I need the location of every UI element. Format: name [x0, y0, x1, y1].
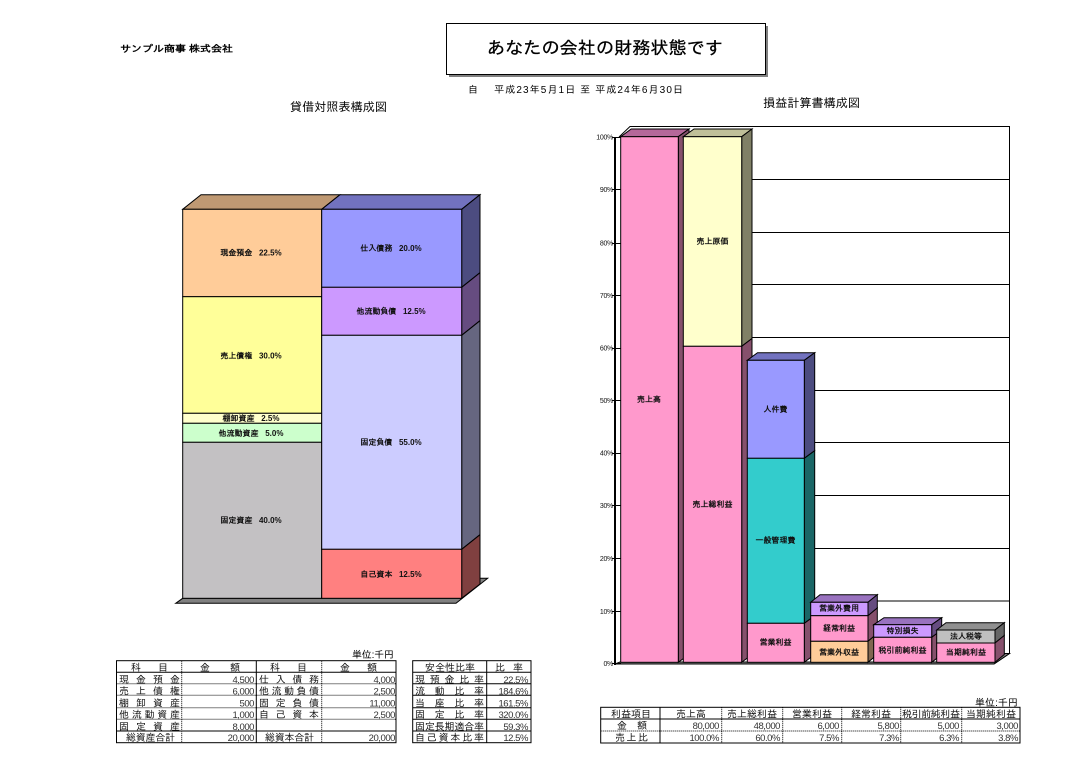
ratio rows: 12.5% — [503, 733, 529, 744]
equity — [322, 549, 462, 598]
bar: sales — [621, 129, 689, 662]
table rows: 棚卸資産 — [119, 698, 180, 710]
chart floor — [176, 578, 488, 603]
table rows: 2,500 — [373, 710, 395, 721]
bar: extraordinary loss and pre-tax profit: 税引前純利益 — [878, 645, 928, 655]
ratio rows: 184.6% — [498, 686, 529, 698]
ratio rows: 22.5% — [503, 675, 529, 686]
header row: 安全性比率 — [425, 662, 475, 674]
table rows: 4,500 — [232, 675, 254, 686]
table rows: 自己資本 — [259, 709, 319, 721]
profit table — [601, 707, 1020, 744]
table rows: 他流動資産 — [119, 709, 180, 721]
chart floor — [615, 654, 1010, 664]
reporting period: 自 平成23年5月1日 至 平成24年6月30日 — [468, 84, 683, 96]
balance sheet chart heading: 貸借対照表構成図 — [290, 100, 387, 114]
sales ratio row: 売上比 — [615, 732, 648, 744]
table rows: 20,000 — [369, 733, 395, 744]
bar: personnel, general admin, operating profit: 人件費 — [764, 404, 788, 414]
header row: 金 額 — [340, 663, 377, 674]
amount row: 48,000 — [754, 721, 780, 732]
equity: 自己資本 12.5% — [360, 569, 422, 579]
table rows: 8,000 — [232, 722, 254, 733]
asset: inventory: 棚卸資産 2.5% — [222, 413, 279, 423]
header row: 売上高 — [676, 710, 706, 720]
amount row: 6,000 — [817, 721, 839, 732]
table rows: 11,000 — [369, 698, 395, 710]
bar: cost of sales and gross profit: 売上総利益 — [692, 499, 734, 509]
amount row: 5,800 — [877, 721, 899, 732]
sales ratio row: 7.5% — [819, 733, 840, 744]
asset: fixed assets: 固定資産 40.0% — [220, 515, 282, 525]
header row: 利益項目 — [611, 708, 651, 720]
ratio rows — [415, 674, 529, 744]
vertical axis: 20% — [600, 556, 613, 563]
vertical axis — [596, 134, 621, 668]
bar: personnel, general admin, operating profit: 一般管理費 — [756, 535, 796, 545]
header row: 科 目 — [270, 663, 307, 674]
ratio rows: 自己資本比率 — [415, 732, 484, 744]
table rows: 他流動負債 — [259, 686, 319, 698]
header row: 金 額 — [200, 663, 240, 674]
amount row: 金 額 — [617, 721, 647, 732]
header row: 営業利益 — [792, 708, 832, 720]
table rows: 固定資産 — [119, 721, 180, 733]
liability: payables: 仕入債務 20.0% — [360, 243, 422, 253]
bar: corporate tax and net profit — [937, 623, 1004, 662]
bar: cost of sales and gross profit — [683, 129, 752, 662]
ratio rows: 固定比率 — [415, 709, 484, 721]
sales ratio row: 60.0% — [755, 733, 781, 744]
bar: non-operating items and ordinary profit: 営業外収益 — [819, 647, 860, 657]
balance sheet table — [116, 661, 396, 744]
safety ratio table — [413, 661, 531, 744]
vertical axis: 90% — [600, 187, 613, 194]
asset: inventory — [183, 413, 322, 423]
bar: corporate tax and net profit: 法人税等 — [950, 631, 982, 641]
table rows: 6,000 — [232, 686, 254, 698]
amount row: 5,000 — [937, 721, 959, 732]
liability: payables — [322, 209, 462, 287]
asset: receivables: 売上債権 30.0% — [220, 350, 282, 360]
header row — [425, 662, 523, 674]
table rows: 現金預金 — [119, 675, 180, 686]
sales ratio row: 100.0% — [689, 733, 720, 744]
asset: receivables — [183, 297, 322, 413]
top faces — [183, 195, 480, 209]
table rows: 総資産合計 — [126, 732, 175, 744]
asset: other current assets: 他流動資産 5.0% — [219, 428, 283, 438]
vertical axis: 0% — [603, 661, 613, 668]
ratio rows: 固定長期適合率 — [415, 722, 484, 733]
table rows: 固定負債 — [259, 698, 319, 710]
ratio rows: 現預金比率 — [415, 674, 484, 686]
header row: 科 目 — [131, 663, 168, 674]
title box: あなたの会社の財務状態です — [487, 38, 723, 58]
back wall and gridlines — [619, 126, 1010, 664]
table rows: 2,500 — [373, 686, 395, 698]
ratio rows: 320.0% — [498, 710, 529, 721]
bar: sales: 売上高 — [637, 394, 661, 404]
bar: non-operating items and ordinary profit — [811, 595, 877, 662]
asset: cash and deposits — [183, 209, 322, 297]
header row: 税引前純利益 — [902, 708, 960, 720]
vertical axis: 30% — [600, 503, 613, 510]
sales ratio row — [615, 732, 1019, 744]
vertical axis: 50% — [600, 398, 613, 405]
bar: extraordinary loss and pre-tax profit: 特別損失 — [886, 626, 920, 636]
vertical axis: 10% — [600, 609, 613, 616]
bar: personnel, general admin, operating profit: 営業利益 — [760, 637, 792, 647]
asset: fixed assets — [183, 442, 322, 598]
vertical axis: 40% — [600, 450, 613, 458]
vertical axis: 70% — [600, 293, 613, 300]
company name: サンプル商事 株式会社 — [120, 43, 234, 55]
sales ratio row: 7.3% — [879, 733, 900, 744]
header row: 比 率 — [495, 662, 523, 674]
bar: non-operating items and ordinary profit: 営業外費用 — [819, 603, 859, 613]
amount row: 80,000 — [693, 721, 719, 732]
table rows: 4,000 — [373, 675, 395, 686]
table rows: 売上債権 — [119, 686, 180, 698]
liability: fixed: 固定負債 55.0% — [360, 437, 422, 447]
ratio rows: 161.5% — [498, 698, 529, 710]
sales ratio row: 3.8% — [998, 733, 1019, 744]
ratio rows: 流動比率 — [415, 686, 484, 698]
liability: other current: 他流動負債 12.5% — [356, 306, 426, 316]
unit label: profit table: 単位:千円 — [975, 697, 1018, 709]
liability: other current — [322, 287, 462, 335]
ratio rows: 当座比率 — [415, 698, 484, 710]
table rows: 総資本合計 — [265, 732, 314, 744]
bar: extraordinary loss and pre-tax profit — [874, 618, 942, 662]
bar: personnel, general admin, operating profit — [747, 353, 815, 662]
vertical axis: 100% — [596, 134, 613, 142]
header row — [611, 708, 1016, 720]
table rows: 20,000 — [228, 733, 254, 744]
unit label: balance table: 単位:千円 — [352, 649, 394, 661]
table rows: 1,000 — [232, 710, 254, 721]
bar: non-operating items and ordinary profit: 経常利益 — [823, 623, 856, 633]
amount row: 3,000 — [996, 721, 1018, 732]
amount row — [617, 721, 1018, 732]
title box — [446, 24, 768, 77]
header row — [131, 663, 377, 674]
vertical axis: 60% — [600, 346, 613, 352]
bar: cost of sales and gross profit: 売上原価 — [696, 236, 728, 246]
table rows — [119, 674, 395, 744]
income statement 3D chart — [596, 126, 1010, 668]
vertical axis: 80% — [600, 240, 613, 248]
liability: fixed — [322, 335, 462, 549]
income statement chart heading: 損益計算書構成図 — [763, 96, 860, 110]
table rows: 500 — [239, 698, 254, 710]
ratio rows: 59.3% — [503, 722, 529, 733]
table rows: 仕入債務 — [259, 674, 319, 686]
balance sheet stacked 3D chart — [176, 195, 488, 603]
asset: cash and deposits: 現金預金 22.5% — [220, 248, 282, 258]
sales ratio row: 6.3% — [939, 733, 960, 744]
asset: other current assets — [183, 423, 322, 442]
side faces — [462, 195, 480, 598]
header row: 経常利益 — [851, 708, 891, 720]
header row: 売上総利益 — [727, 708, 777, 720]
header row: 当期純利益 — [966, 708, 1016, 720]
bar: corporate tax and net profit: 当期純利益 — [946, 647, 987, 657]
